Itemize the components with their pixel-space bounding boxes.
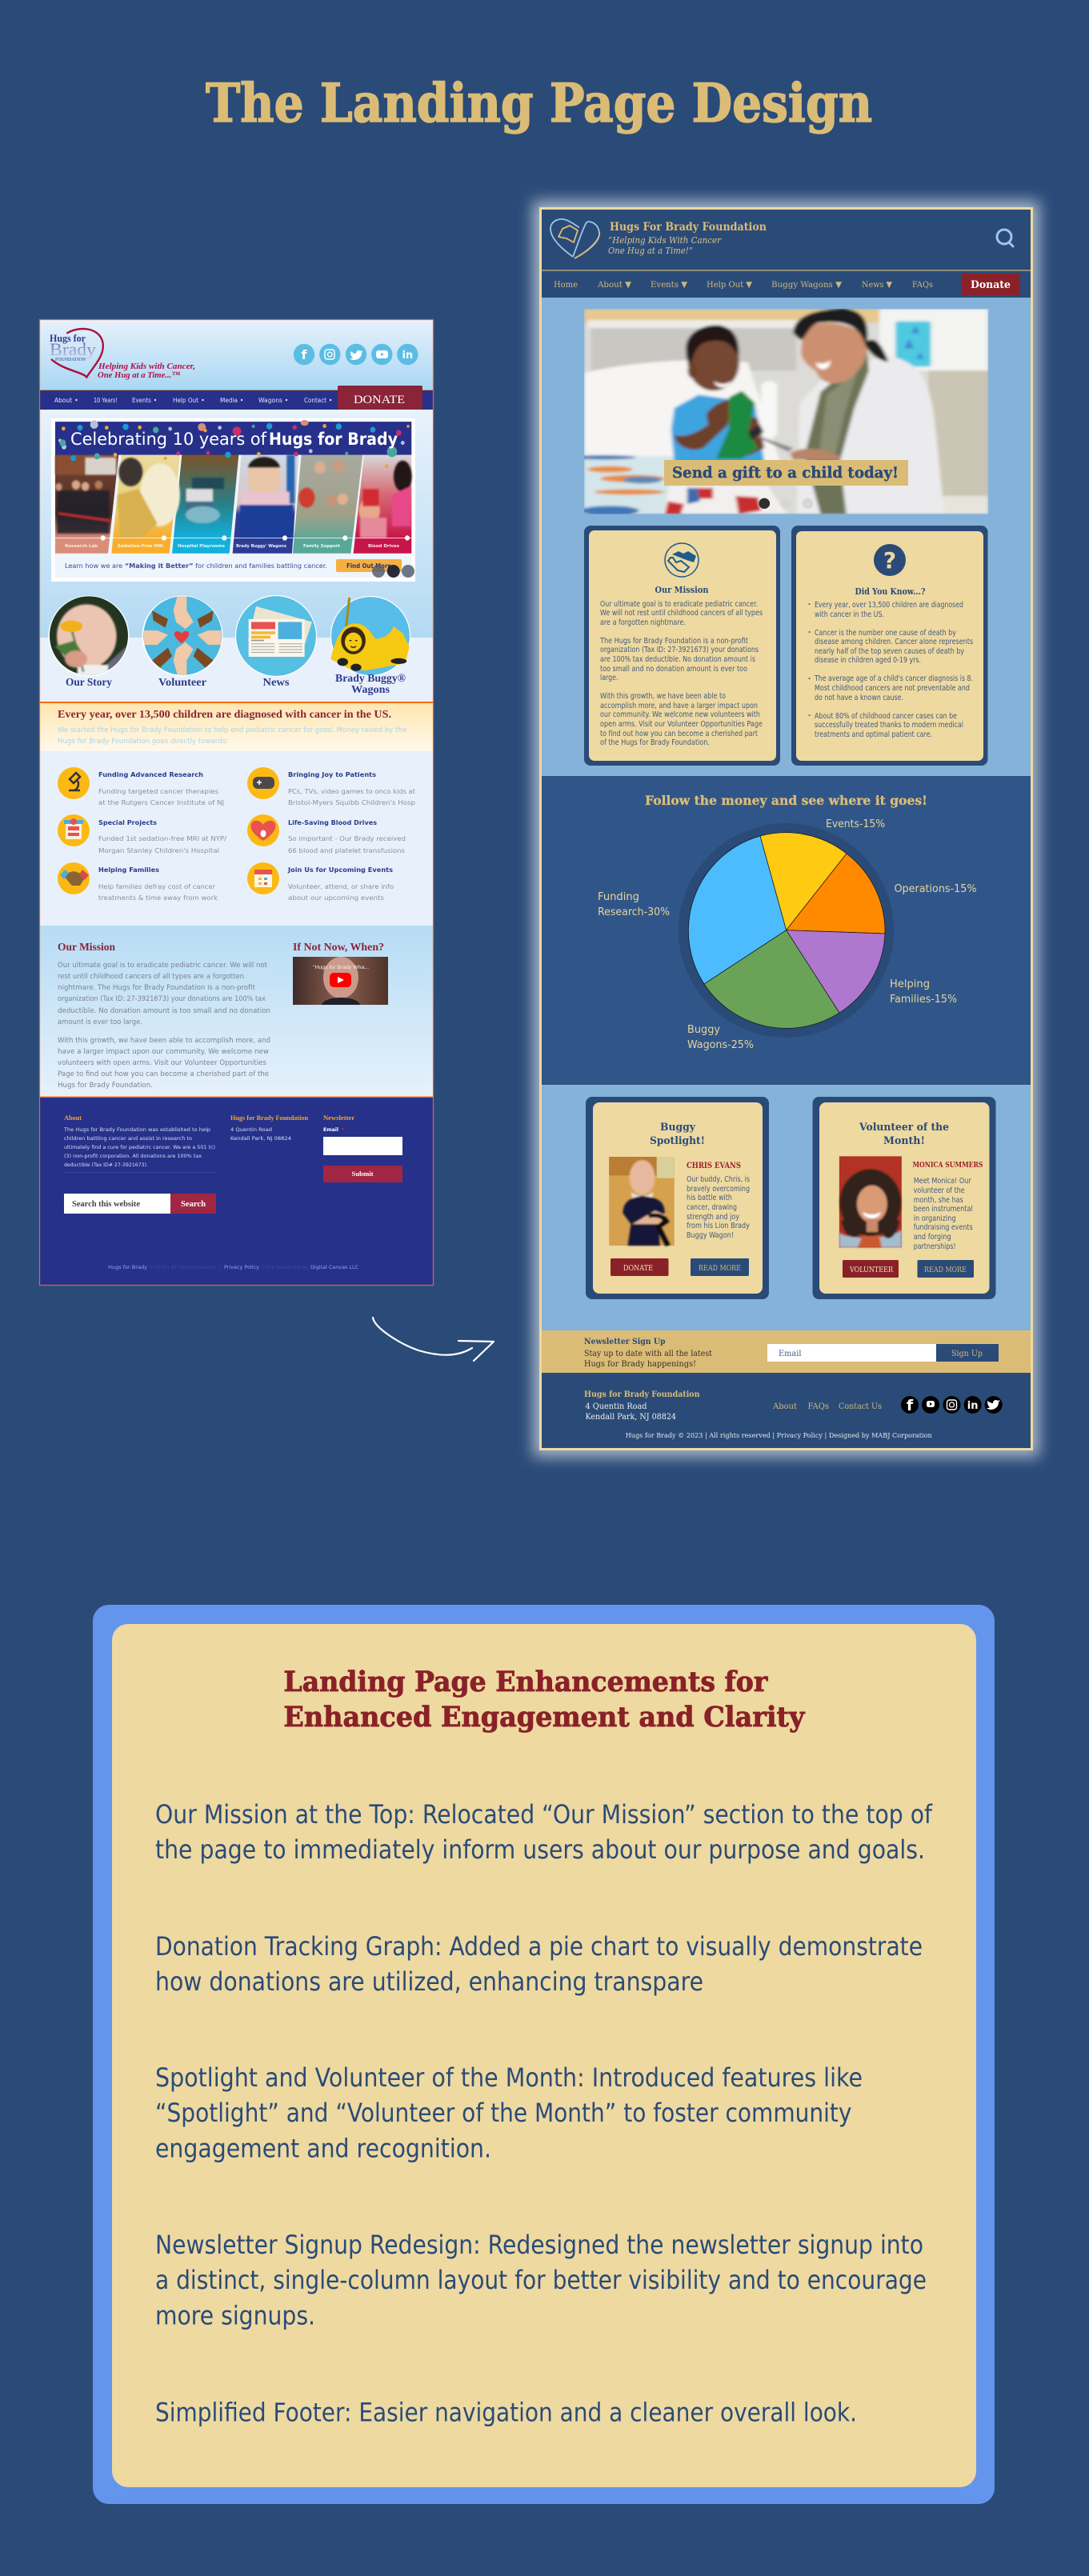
social icons: in xyxy=(402,350,413,362)
icon: hugs for brady logo: Hugs for xyxy=(50,332,86,344)
panel: original footer: Hugs for Brady Foundation xyxy=(230,1114,309,1122)
benefit: life-saving blood drives: So important - Our Brady received xyxy=(288,835,406,842)
circle: volunteer xyxy=(142,595,224,678)
chris evans text: Buggy Wagon! xyxy=(687,1231,734,1240)
redesigned nav: Events ▼ xyxy=(651,280,688,290)
panel: redesigned landing page mockup xyxy=(539,207,1033,1450)
circle: news xyxy=(235,595,317,677)
original nav bar: Help Out xyxy=(173,397,198,404)
card: our mission: We will not rest until childhood cancers of all types xyxy=(600,609,763,618)
benefit: helping families: Help families defray cost of cancer xyxy=(98,883,216,890)
card: did you know: disease among children. Cancer alone represents xyxy=(815,638,973,646)
panel: original footer: children battling cancer and assist in research to xyxy=(64,1135,192,1142)
pie labels: Research-30% xyxy=(598,906,670,918)
original nav bar: About xyxy=(54,397,72,404)
card: buggy spotlight: Buggy xyxy=(660,1122,695,1134)
item: newsletter signup redesign xyxy=(155,2230,927,2331)
monica summers text: Meet Monica! Our xyxy=(914,1177,971,1186)
panel: original footer: Kendall Park, NJ 08824 xyxy=(230,1135,291,1142)
volunteer buttons: VOLUNTEER xyxy=(849,1266,894,1274)
banner: celebrating 10 years: Hospital Playrooms xyxy=(178,544,226,549)
original nav bar: Events xyxy=(132,397,151,404)
site name and tagline xyxy=(608,221,767,256)
benefit: funding advanced research xyxy=(58,767,224,806)
chris evans text: from his Lion Brady xyxy=(687,1222,750,1230)
redesigned footer xyxy=(542,1373,1031,1448)
card: our mission: too small and no donation amount is ever too xyxy=(600,665,747,674)
volunteer buttons: READ MORE xyxy=(924,1266,967,1274)
panel: original our mission xyxy=(40,926,433,1097)
icon: hugs for brady logo xyxy=(50,329,103,377)
circle: our story xyxy=(48,595,130,678)
panel: original our mission: Our Mission xyxy=(58,942,115,954)
benefit: helping families: treatments & time away from work xyxy=(98,894,218,902)
benefit: bringing joy to patients: Bringing Joy to Patients xyxy=(288,771,376,778)
panel: original footer: * xyxy=(342,1126,345,1133)
monica summers text: fundraising events xyxy=(914,1223,973,1232)
original nav bar: Media xyxy=(220,397,238,404)
item: donation tracking graph: how donations are utilized, enhancing transpare xyxy=(155,1966,703,1997)
social icons: f xyxy=(907,1397,914,1414)
card: did you know: nearly half of the top seven causes of death by xyxy=(815,647,964,656)
pie labels: Events-15% xyxy=(826,818,885,830)
card: our mission: accomplish more, and have a larger impact upon xyxy=(600,702,758,710)
panel: original our mission: Hugs for Brady Foundation. xyxy=(58,1082,153,1090)
circle: brady buggy wagons xyxy=(330,597,410,675)
panel: original footer: reserved. | xyxy=(192,1264,221,1270)
cream statement band: Hugs for Brady Foundation goes directly towards: xyxy=(58,738,228,746)
banner: celebrating 10 years: Hugs for Brady xyxy=(269,430,398,449)
newsletter signup band: Hugs for Brady happenings! xyxy=(584,1360,696,1369)
card: did you know: successfully treated thanks to modern medical xyxy=(815,721,963,730)
photo: monica xyxy=(839,1156,902,1247)
title: The Landing Page Design xyxy=(206,72,872,134)
panel: original footer: Email xyxy=(323,1126,338,1133)
card: our mission: The Hugs for Brady Foundation is a non-profit xyxy=(599,637,748,646)
social icons xyxy=(294,344,418,365)
item: newsletter signup redesign: a distinct, single-column layout for better visibility and to encourage xyxy=(155,2265,927,2295)
pie labels xyxy=(598,818,976,1051)
card: our mission: large. xyxy=(600,674,618,682)
icon: question mark xyxy=(874,544,906,576)
panel: original footer: About xyxy=(64,1114,82,1122)
icon: hugs for brady logo: FOUNDATION xyxy=(55,358,86,362)
benefit: bringing joy to patients: PCs, TVs, video games to onco kids at xyxy=(288,788,415,795)
banner: celebrating 10 years: Celebrating 10 years of xyxy=(70,430,267,449)
pie labels: Families-15% xyxy=(890,994,957,1006)
cream statement band: Every year, over 13,500 children are diagnosed with cancer in the US. xyxy=(58,709,391,721)
panel: original footer: Privacy Policy xyxy=(224,1264,259,1270)
benefit: life-saving blood drives: 66 blood and platelet transfusions xyxy=(288,847,405,854)
card: our mission: are a forgotten nightmare. xyxy=(600,618,686,627)
newsletter signup band: Stay up to date with all the latest xyxy=(584,1350,712,1358)
card: our mission: to find out how you can become a cherished part xyxy=(600,730,758,738)
item: our mission at the top: the page to immediately inform users about our purpose and goals. xyxy=(155,1834,925,1865)
panel: original our mission: amount is ever too large. xyxy=(58,1018,142,1026)
panel: original footer: Submit xyxy=(352,1170,374,1178)
social icons: in xyxy=(967,1400,978,1412)
panel: original our mission: Page to find out how you can become a cherished part of the xyxy=(58,1070,269,1078)
banner: celebrating 10 years: Find Out More xyxy=(346,562,391,570)
card: did you know: Cancer is the number one cause of death by xyxy=(815,629,956,638)
panel: original our mission: deductible. No donation amount is too small and no donation xyxy=(58,1007,270,1015)
lower band behind circles xyxy=(40,638,433,702)
item: spotlight and volunteer of the month: Spotlight and Volunteer of the Month: Introduced features like xyxy=(155,2062,863,2093)
icon: search xyxy=(997,230,1013,246)
redesigned footer: About xyxy=(772,1402,798,1411)
redesigned nav: FAQs xyxy=(912,280,933,290)
hero caption xyxy=(664,460,908,486)
monica summers text: in organizing xyxy=(914,1214,956,1223)
item: our mission at the top xyxy=(155,1799,933,1865)
banner: celebrating 10 years: Family Support xyxy=(303,544,340,549)
original donate button xyxy=(338,386,422,413)
benefit: join us for upcoming events: Join Us for Upcoming Events xyxy=(287,866,393,874)
chris evans text: Our buddy, Chris, is xyxy=(687,1175,750,1184)
benefit: join us for upcoming events xyxy=(247,862,394,902)
panel: original our mission: have a larger impact upon our community. We welcome new xyxy=(58,1048,269,1056)
benefit: bringing joy to patients: Bristol-Myers Squibb Children's Hosp xyxy=(288,799,415,806)
label: news: News xyxy=(262,677,290,689)
label: brady buggy wagons: Brady Buggy® xyxy=(335,673,406,685)
panel: original footer: Hugs for Brady xyxy=(108,1264,147,1270)
chris evans text: bravely overcoming xyxy=(687,1185,750,1194)
card: volunteer of the month xyxy=(813,1097,995,1299)
item: newsletter signup redesign: Newsletter Signup Redesign: Redesigned the newsletter signup into xyxy=(155,2230,923,2260)
original nav bar: Wagons xyxy=(258,397,282,404)
monica summers text: MONICA SUMMERS xyxy=(912,1161,983,1170)
chris evans text xyxy=(687,1162,750,1240)
hero caption: Send a gift to a child today! xyxy=(672,464,899,482)
icon: heart logo xyxy=(551,219,599,258)
chris evans text: cancer, drawing xyxy=(687,1203,737,1212)
panel: original landing page mockup xyxy=(39,319,434,1286)
spotlight buttons: DONATE xyxy=(623,1264,653,1273)
card: our mission: of the Hugs for Brady Foundation. xyxy=(600,738,710,747)
panel: follow the money xyxy=(542,776,1031,1085)
card: did you know: treatments and optimal patient care. xyxy=(815,730,932,739)
card: did you know: do not have a known cause. xyxy=(815,694,903,702)
banner: celebrating 10 years: Learn how we are “Making it Better” for children and families battling cancer. xyxy=(65,562,327,570)
spotlight buttons xyxy=(611,1258,749,1276)
volunteer buttons xyxy=(843,1260,974,1278)
item: donation tracking graph: Donation Tracking Graph: Added a pie chart to visually demonstrate xyxy=(155,1931,923,1962)
pie labels: Funding xyxy=(598,891,639,903)
tagline xyxy=(98,362,195,380)
chris evans text: his battle with xyxy=(687,1194,732,1202)
original nav bar: Contact xyxy=(304,397,326,404)
social icons: f xyxy=(302,347,308,362)
redesigned footer: FAQs xyxy=(808,1402,829,1411)
panel: original our mission: Our ultimate goal is to eradicate pediatric cancer. We will not xyxy=(58,962,268,970)
redesigned nav: About ▼ xyxy=(597,280,632,290)
panel: follow the money: Follow the money and see where it goes! xyxy=(645,793,927,808)
panel: original footer: (3) non-profit corporation. All donations are 100% tax xyxy=(64,1153,202,1159)
photo: chris xyxy=(609,1157,675,1246)
label: brady buggy wagons: Wagons xyxy=(351,684,390,696)
panel: original footer xyxy=(40,1096,433,1285)
card: buggy spotlight: Spotlight! xyxy=(650,1135,705,1147)
redesigned nav: Help Out ▼ xyxy=(707,280,753,290)
tagline: Helping Kids with Cancer, xyxy=(98,362,195,371)
panel: original footer: | Site Designed by xyxy=(262,1264,308,1270)
benefit: special projects: Funded 1st sedation-free MRI at NYP/ xyxy=(98,835,226,842)
panel: original footer: Search xyxy=(181,1200,206,1209)
panel: original our mission: rest until childhood cancers of all types are a forgotten xyxy=(58,973,244,981)
item: newsletter signup redesign: more signups. xyxy=(155,2301,315,2331)
redesigned nav: News ▼ xyxy=(862,280,893,290)
redesigned footer: Contact Us xyxy=(839,1402,882,1411)
panel: original our mission: nightmare. The Hugs for Brady Foundation is a non-profit xyxy=(58,984,256,992)
card: did you know: Most childhood cancers are not preventable and xyxy=(815,684,970,693)
site name and tagline: One Hug at a Time!” xyxy=(608,246,693,256)
benefit: funding advanced research: Funding Advanced Research xyxy=(98,771,203,778)
monica summers text: partnerships! xyxy=(914,1242,956,1251)
panel: original footer: ultimately find a cure for pediatric cancer. We are a 501 (c) xyxy=(64,1144,215,1150)
benefit: special projects: Special Projects xyxy=(98,819,157,826)
card: did you know: with cancer in the US. xyxy=(815,610,884,619)
original header xyxy=(40,320,433,390)
glow behind redesign xyxy=(533,201,1039,1457)
card: our mission xyxy=(584,526,780,766)
card: our mission: open arms. Visit our Volunteer Opportunities Page xyxy=(600,720,763,729)
original nav bar: 10 Years! xyxy=(94,397,118,404)
original donate button: DONATE xyxy=(354,394,405,406)
benefit: funding advanced research: Funding targeted cancer therapies xyxy=(98,788,218,795)
redesigned footer: Hugs for Brady Foundation xyxy=(584,1390,700,1399)
panel: original footer: The Hugs for Brady Foundation was established to help xyxy=(63,1126,210,1133)
item: spotlight and volunteer of the month: engagement and recognition. xyxy=(155,2133,491,2163)
redesigned footer: Hugs for Brady © 2023 | All rights reserved | Privacy Policy | Designed by MABJ Corporation xyxy=(626,1432,932,1440)
panel: if not now, when video: "Hugs for Brady Wha... xyxy=(313,965,369,970)
cream statement band: We started the Hugs for Brady Foundation to help end pediatric cancer for good. Money raised by the xyxy=(58,726,406,734)
card: did you know: The average age of a child's cancer diagnosis is 8. xyxy=(814,674,973,683)
label: brady buggy wagons xyxy=(335,673,406,696)
panel: original our mission: With this growth, we have been able to accomplish more, and xyxy=(58,1037,270,1045)
redesigned header xyxy=(542,210,1031,271)
card: our mission: With this growth, we have been able to xyxy=(600,692,726,701)
item: donation tracking graph xyxy=(155,1931,923,1997)
redesigned nav: Home xyxy=(554,280,578,290)
monica summers text xyxy=(912,1161,983,1251)
sky gradient background xyxy=(40,410,433,638)
original nav bar xyxy=(40,390,433,410)
card: volunteer of the month: Month! xyxy=(883,1135,925,1147)
panel: original footer: 4 Quentin Road xyxy=(230,1126,272,1133)
pie chart xyxy=(679,823,894,1038)
panel: original footer: Newsletter xyxy=(323,1114,354,1122)
redesigned nav: Donate xyxy=(971,279,1011,291)
card: buggy spotlight xyxy=(586,1097,769,1299)
label: volunteer: Volunteer xyxy=(158,677,206,689)
benefit: special projects: Morgan Stanley Children's Hospital xyxy=(98,847,219,854)
item: spotlight and volunteer of the month: “Spotlight” and “Volunteer of the Month” to foster community xyxy=(155,2098,851,2128)
redesigned nav xyxy=(542,271,1031,298)
benefit: funding advanced research: at the Rutgers Cancer Institute of NJ xyxy=(98,799,224,806)
redesigned nav: Buggy Wagons ▼ xyxy=(771,280,843,290)
benefit: life-saving blood drives xyxy=(247,814,406,854)
benefit: helping families xyxy=(58,862,218,902)
benefit: join us for upcoming events: Volunteer, attend, or share info xyxy=(288,883,394,890)
card: our mission: Our ultimate goal is to eradicate pediatric cancer. xyxy=(600,600,758,609)
icon: question mark: ? xyxy=(883,547,896,574)
redesigned footer: 4 Quentin Road xyxy=(586,1402,647,1411)
heading xyxy=(283,1666,806,1734)
label: our story: Our Story xyxy=(66,677,112,689)
banner: celebrating 10 years: Blood Drives xyxy=(368,544,400,549)
card: did you know xyxy=(791,526,987,766)
card: our mission: our community. We welcome new volunteers with xyxy=(600,710,760,719)
newsletter signup band: Sign Up xyxy=(951,1350,983,1358)
benefit: helping families: Helping Families xyxy=(98,866,159,874)
newsletter signup band: Email xyxy=(779,1350,802,1358)
item: simplified footer: Simplified Footer: Easier navigation and a cleaner overall look. xyxy=(155,2397,857,2427)
banner: celebrating 10 years: Sedation-Free MRI xyxy=(118,544,163,549)
benefit: life-saving blood drives: Life-Saving Blood Drives xyxy=(288,819,377,826)
monica summers text: month, she has xyxy=(914,1196,963,1205)
panel: landing page enhancements xyxy=(93,1605,995,2504)
card: did you know: About 80% of childhood cancer cases can be xyxy=(815,712,957,721)
pie labels: Wagons-25% xyxy=(687,1039,754,1051)
monica summers text: and forging xyxy=(914,1233,951,1242)
tagline: One Hug at a Time...™ xyxy=(98,370,180,380)
item: spotlight and volunteer of the month xyxy=(155,2062,863,2163)
icon: handshake xyxy=(665,543,699,577)
panel: original footer: deductible (Tax ID# 27-3921673). xyxy=(64,1162,148,1168)
panel: if not now, when video xyxy=(293,942,388,1005)
monica summers text: been instrumental xyxy=(914,1205,973,1214)
panel: if not now, when video: If Not Now, When? xyxy=(293,942,384,954)
card: our mission: organization (Tax ID: 27-3921673) your donations xyxy=(600,646,759,654)
panel: original footer: Digital Canvas LLC xyxy=(310,1264,358,1270)
redesigned footer: Kendall Park, NJ 08824 xyxy=(586,1412,676,1422)
item: our mission at the top: Our Mission at the Top: Relocated “Our Mission” section to the top of xyxy=(155,1799,933,1830)
cream statement band xyxy=(40,702,433,751)
pie labels: Helping xyxy=(890,978,930,990)
heading: Enhanced Engagement and Clarity xyxy=(283,1701,806,1734)
panel: original our mission: organization (Tax ID: 27-3921673) your donations are 100% tax xyxy=(58,995,266,1003)
benefit: special projects xyxy=(58,814,226,854)
newsletter signup band: Newsletter Sign Up xyxy=(584,1338,666,1346)
chris evans text: strength and joy xyxy=(687,1213,739,1222)
card: did you know: Every year, over 13,500 children are diagnosed xyxy=(815,601,963,610)
arrow xyxy=(373,1318,494,1361)
pie labels: Buggy xyxy=(687,1024,720,1036)
icon: hugs for brady logo: Brady xyxy=(50,339,96,359)
panel: original footer: © 2023 | All rights xyxy=(149,1264,192,1270)
card: our mission: are 100% tax deductible. No donation amount is xyxy=(600,655,755,664)
benefit: bringing joy to patients xyxy=(247,767,415,806)
panel: original footer: Search this website xyxy=(72,1200,141,1209)
hero photo: doctor and child xyxy=(571,309,988,515)
panel: original our mission: volunteers with open arms. Visit our Volunteer Opportunities xyxy=(58,1059,267,1067)
card: volunteer of the month: Volunteer of the xyxy=(859,1122,949,1134)
spotlight buttons: READ MORE xyxy=(699,1264,741,1273)
benefit: join us for upcoming events: about our upcoming events xyxy=(288,894,384,902)
site name and tagline: “Helping Kids With Cancer xyxy=(608,235,722,246)
newsletter signup band xyxy=(542,1330,1031,1373)
site name and tagline: Hugs For Brady Foundation xyxy=(610,221,767,234)
card: did you know: Did You Know...? xyxy=(855,586,925,597)
pie labels: Operations-15% xyxy=(895,883,976,895)
banner: celebrating 10 years xyxy=(51,418,415,582)
monica summers text: volunteer of the xyxy=(914,1186,965,1195)
heading: Landing Page Enhancements for xyxy=(283,1666,768,1698)
chris evans text: CHRIS EVANS xyxy=(687,1162,741,1170)
banner: celebrating 10 years: Research Lab xyxy=(65,544,98,549)
social icons xyxy=(901,1396,1003,1414)
card: did you know: disease in children aged 0-19 yrs. xyxy=(815,656,921,665)
banner: celebrating 10 years: Brady Buggy' Wagons xyxy=(236,544,287,549)
card: our mission: Our Mission xyxy=(655,585,709,595)
